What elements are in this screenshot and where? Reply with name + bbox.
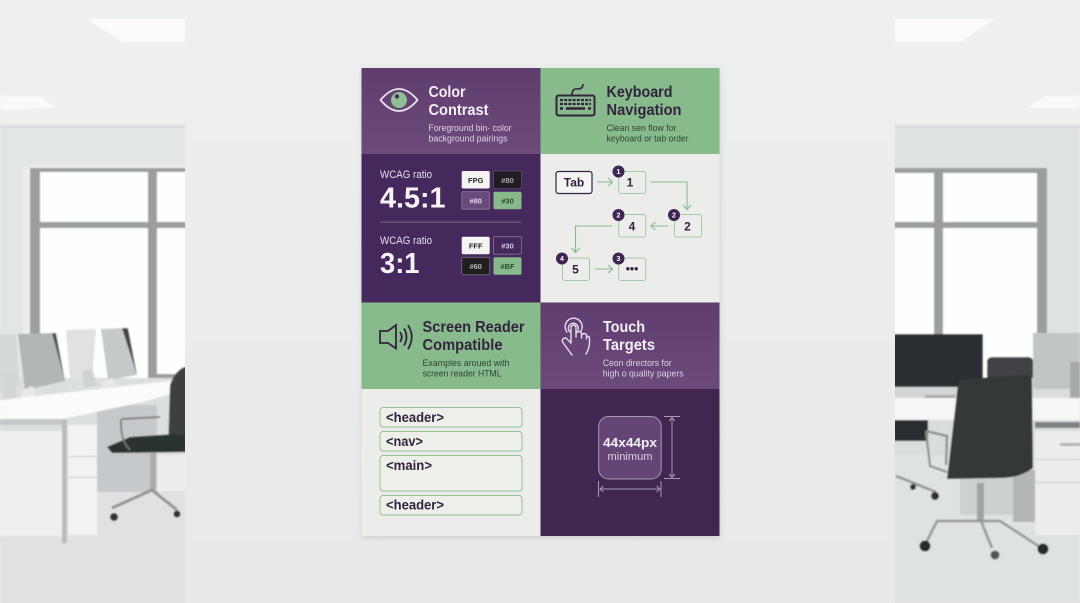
heading: screen reader compatible: Compatible [422,337,503,354]
heading: touch targets: Targets [603,337,655,354]
icon: speaker [380,325,412,349]
description: color contrast: background pairings [428,134,508,144]
heading: color contrast [428,84,488,119]
description: screen reader: Examples aroued with [422,358,510,368]
panel: color contrast header [362,68,540,154]
description: color contrast: Foreground bin· color [428,123,512,133]
ratio 4.5:1: 4.5:1 [380,182,446,214]
description: keyboard navigation: Clean sen flow for [606,123,676,133]
code box footer [380,496,522,515]
step box 5 [556,252,590,280]
description: touch targets: Ceon directors for [603,358,672,368]
flow arrows [572,178,691,273]
icon: keyboard [556,84,594,116]
description: color contrast [428,123,512,144]
swatches for 4.5:1: FPG [468,176,484,185]
office background left [0,0,188,603]
code box footer: <header> [386,498,444,512]
step box more: ••• [626,262,638,276]
panel: semantic HTML list [362,389,540,536]
swatches for 4.5:1: #30 [501,196,514,206]
step box 2: 2 [672,212,676,220]
ratio 3:1: WCAG ratio [380,235,432,247]
tab key [556,172,592,194]
poster [362,68,720,538]
swatches for 3:1: #30 [501,242,514,250]
heading: keyboard navigation: Navigation [606,102,682,119]
heading: touch targets: Touch [603,319,645,336]
description: touch targets [603,358,684,378]
step box 2 [668,209,702,237]
target square: 44x44px [603,435,658,450]
swatches for 3:1 [462,237,522,275]
dimension arrow horizontal [598,481,661,497]
heading: color contrast: Contrast [428,102,488,119]
step box 4: 4 [629,220,636,234]
step box 1 [612,166,646,194]
target square: minimum [608,451,652,463]
step box 4: 2 [617,212,621,220]
ratio 4.5:1 [380,169,446,214]
step box 5: 4 [560,256,564,263]
center wall [185,0,895,603]
code box nav: <nav> [386,434,423,449]
description: keyboard navigation [606,123,688,144]
step box 5: 5 [572,262,579,276]
heading: color contrast: Color [428,84,466,101]
panel: tab order diagram [540,154,720,302]
panel: touch target size [540,389,720,536]
ratio 3:1 [380,235,432,280]
swatches for 3:1: #60 [469,262,482,271]
icon: pointing hand [562,318,590,355]
code box header: <header> [386,410,444,425]
description: touch targets: high o quality papers [603,368,684,378]
panel: touch targets header [540,302,720,389]
code box nav [380,432,522,451]
heading: keyboard navigation: Keyboard [606,84,672,101]
step box more [612,252,646,280]
target square [599,416,661,479]
swatches for 3:1: FFF [469,242,483,250]
swatches for 4.5:1: #80 [469,196,482,206]
panel: screen reader header [362,302,540,389]
description: screen reader [422,358,510,378]
heading: screen reader compatible [422,319,524,354]
swatches for 4.5:1 [462,171,522,209]
swatches for 4.5:1: #80 [501,176,514,185]
code box main: <main> [386,458,432,473]
panel: keyboard navigation header [540,68,720,154]
heading: touch targets [603,319,655,354]
office background right [892,0,1080,603]
ratio 4.5:1: WCAG ratio [380,169,432,181]
step box 2: 2 [684,220,691,234]
code box header [380,408,522,427]
heading: keyboard navigation [606,84,682,119]
heading: screen reader compatible: Screen Reader [422,319,524,336]
step box 1: 1 [627,176,634,190]
step box 1: 1 [617,169,621,176]
description: screen reader: screen reader HTML [422,368,502,378]
icon: eye [380,89,418,111]
code box main [380,456,522,491]
swatches for 3:1: #BF [500,262,515,271]
ratio 3:1: 3:1 [380,248,420,280]
step box 4 [612,209,646,237]
description: keyboard navigation: keyboard or tab order [606,134,688,144]
step box more: 3 [617,256,621,263]
panel: WCAG ratios [362,154,540,302]
dimension arrow vertical [664,416,680,478]
tab key: Tab [564,176,584,190]
